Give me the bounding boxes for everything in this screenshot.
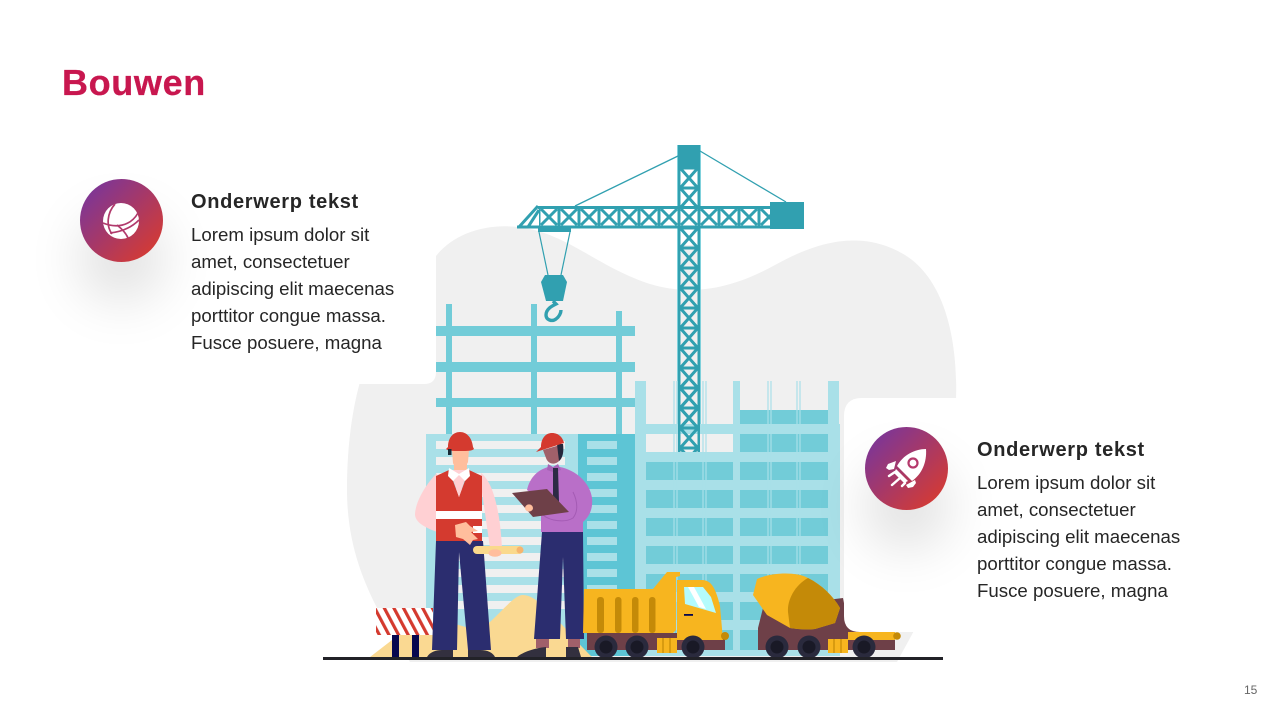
dump truck (583, 572, 729, 658)
text block: left topic (191, 191, 394, 353)
ground line (323, 657, 943, 660)
icon: rocket (865, 427, 948, 510)
panel: right text backing (844, 398, 1280, 632)
page number: 15 (1244, 683, 1257, 697)
body text: Fusce posuere, magna (977, 580, 1168, 601)
heading: Onderwerp tekst (977, 439, 1145, 461)
body text: Lorem ipsum dolor sit (977, 472, 1155, 493)
panel: left text backing (0, 0, 436, 384)
right building (635, 381, 840, 656)
text block: right topic (977, 439, 1180, 601)
body text: Fusce posuere, magna (191, 332, 382, 353)
middle building (426, 434, 635, 656)
worker with vest (415, 432, 524, 657)
body text: porttitor congue massa. (191, 305, 386, 326)
body text: porttitor congue massa. (977, 553, 1172, 574)
crane (517, 145, 804, 452)
heading: Onderwerp tekst (191, 191, 359, 213)
mixer truck (753, 574, 901, 658)
barrier (376, 608, 433, 657)
body text: amet, consectetuer (191, 251, 350, 272)
worker with clipboard (512, 433, 592, 657)
scaffold building (436, 304, 635, 436)
body text (191, 224, 394, 353)
title: Bouwen (62, 62, 206, 103)
body text: Lorem ipsum dolor sit (191, 224, 369, 245)
body text: adipiscing elit maecenas (191, 278, 394, 299)
body text (977, 472, 1180, 601)
background blob (347, 226, 956, 662)
icon: globe (80, 179, 163, 262)
illustration: construction site (323, 145, 943, 660)
sand pile (370, 595, 592, 657)
body text: adipiscing elit maecenas (977, 526, 1180, 547)
body text: amet, consectetuer (977, 499, 1136, 520)
